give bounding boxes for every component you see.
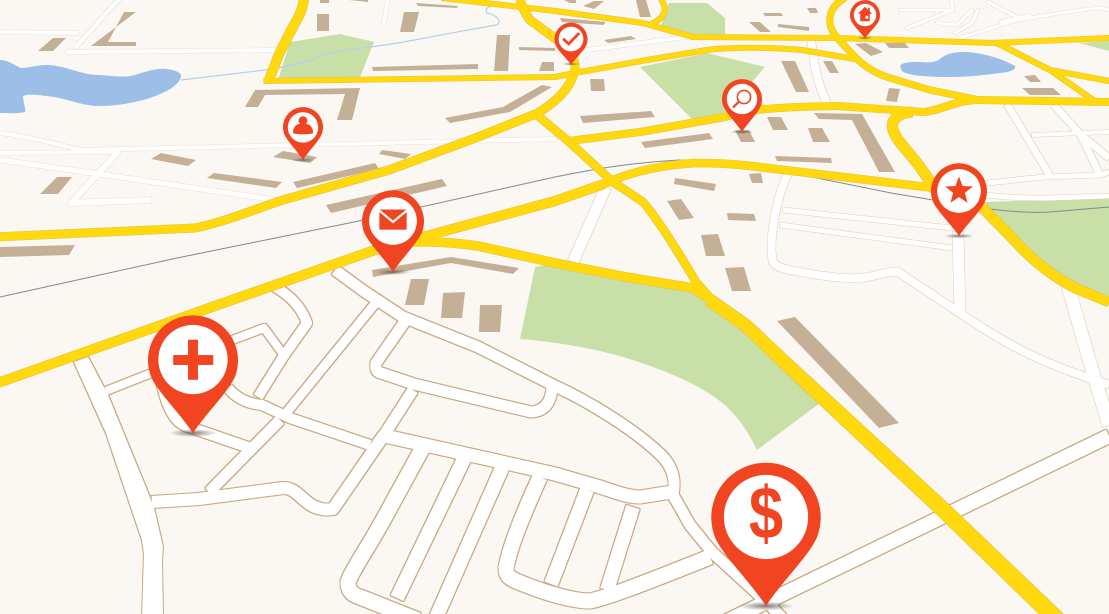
road: upper left highway [0, 0, 575, 237]
pin: search [722, 79, 762, 134]
mid streets [573, 40, 1109, 425]
park: top right corner [1079, 41, 1109, 51]
pin: home [850, 0, 880, 39]
icon: magnifier [733, 90, 751, 107]
road: main diagonal upper [537, 115, 712, 300]
green parks [278, 3, 1109, 450]
road: top loop branch [650, 0, 665, 25]
road: top horizontal [442, 0, 1109, 43]
icon: person [293, 116, 313, 134]
park: large central [520, 263, 820, 450]
road: main diagonal lower, tapered [706, 295, 1066, 614]
pale upper streets [0, 0, 1109, 203]
river line [181, 5, 499, 80]
road: star pin to right [975, 200, 1109, 302]
road: left top block [269, 0, 304, 80]
road: curve to star pin [892, 112, 935, 190]
pin: mail [362, 190, 424, 275]
pin: dollar [711, 463, 821, 610]
icon: house [858, 7, 872, 21]
pin: person [283, 107, 323, 162]
road: right branch [1050, 70, 1109, 81]
pin: star [931, 163, 987, 238]
road: branch to central junction [390, 242, 712, 300]
lake: upper right [900, 52, 1015, 77]
park: upper left [278, 34, 374, 80]
road: top right loop [830, 0, 979, 100]
park: top centre [661, 3, 725, 37]
buildings [0, 0, 1061, 428]
road: highway to star pin [604, 163, 935, 188]
icon: envelope [379, 210, 407, 230]
road: lower long highway [0, 184, 604, 384]
pin: medical plus [148, 315, 238, 437]
lake: left [0, 60, 181, 113]
blue water [0, 52, 1015, 113]
road: right diagonal [997, 43, 1096, 102]
park: upper centre [640, 53, 771, 120]
lower white street network [74, 270, 1109, 614]
icon: check [563, 33, 579, 44]
park: right [985, 198, 1109, 296]
icon: dollar sign: $ [749, 472, 783, 555]
railway line [0, 160, 1109, 297]
icon: star [945, 176, 973, 203]
icon: plus [173, 340, 213, 380]
road: middle horizontal [569, 100, 1109, 141]
pin: check mark [554, 23, 588, 66]
